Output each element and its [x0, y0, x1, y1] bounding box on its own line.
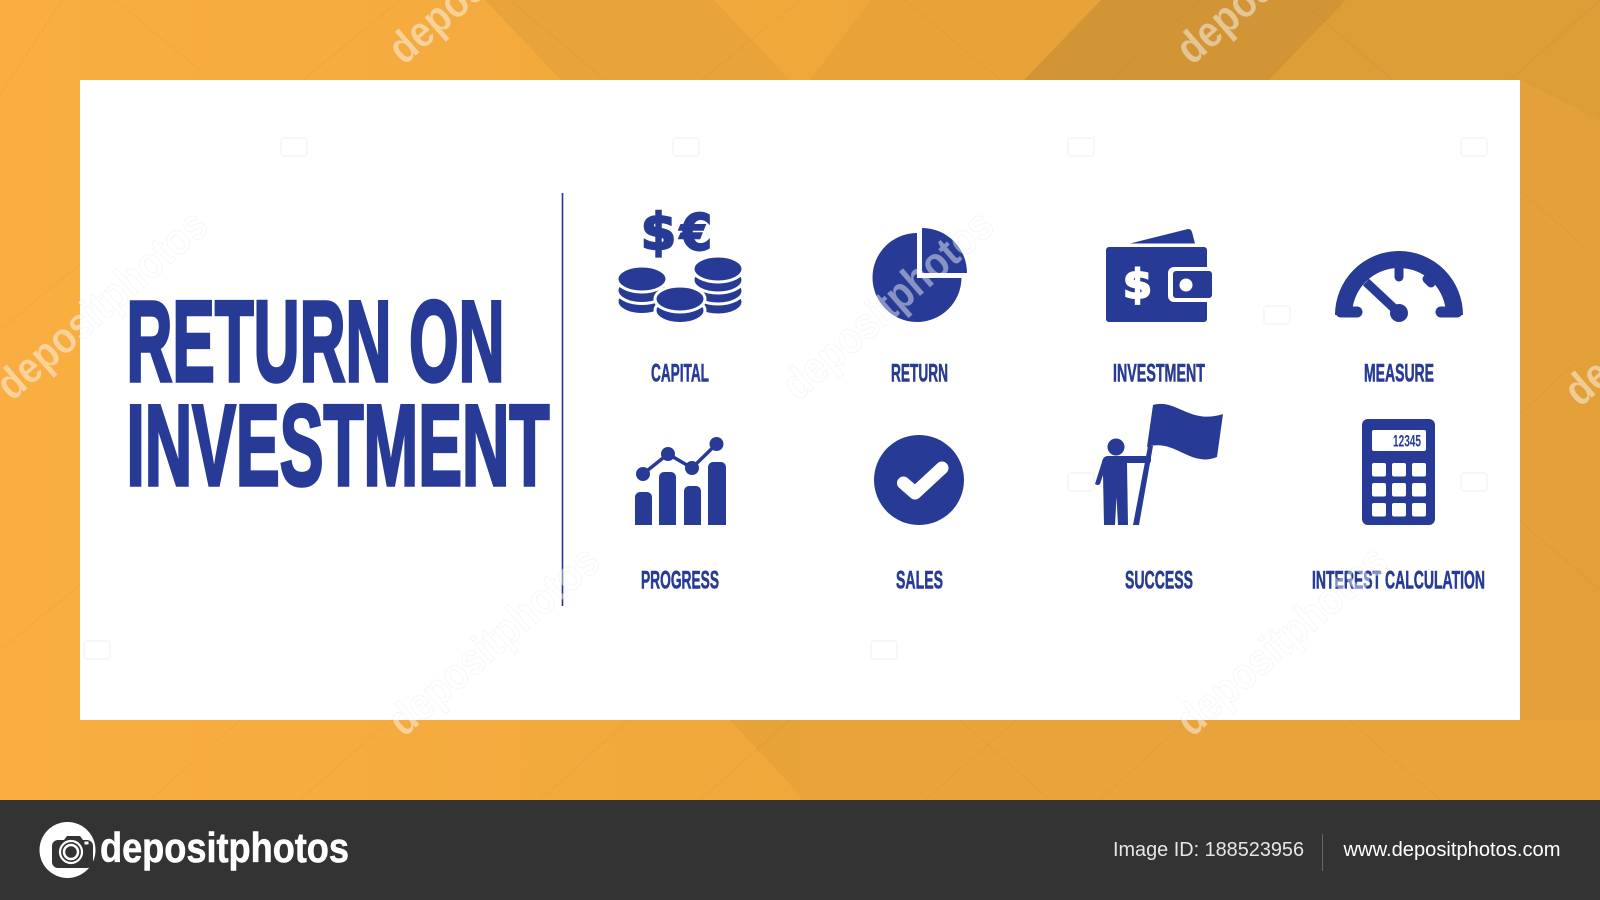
label: return: RETURN — [891, 360, 948, 388]
label: sales: SALES — [896, 567, 943, 595]
icon: capital, currency and coins — [617, 203, 743, 324]
icon: measure, gauge — [1341, 260, 1457, 322]
icon: interest calculation, calculator — [1362, 419, 1435, 525]
white content panel — [80, 80, 1520, 720]
image id: Image ID: 188523956 — [1113, 839, 1304, 861]
icon: sales, check mark — [874, 435, 964, 525]
icon: capital, currency and coins: $ — [641, 203, 676, 261]
icon: capital, currency and coins: € — [679, 204, 712, 262]
title: return on investment: INVESTMENT — [126, 382, 550, 510]
watermarks: depositphotos — [772, 200, 1003, 410]
icon: investment, wallet — [1106, 229, 1214, 322]
footer logo — [40, 822, 349, 878]
website url: www.depositphotos.com — [1342, 839, 1560, 861]
icon: return, pie chart — [873, 228, 967, 322]
icon: progress, bars and line — [635, 437, 726, 525]
watermarks: depositphotos — [378, 536, 609, 746]
footer bar — [0, 800, 1600, 900]
watermarks: depositphotos — [1166, 536, 1397, 746]
icon: success, person with flag — [1095, 404, 1223, 525]
title: return on investment — [126, 278, 550, 510]
icon: investment, wallet: $ — [1123, 262, 1152, 308]
vertical divider — [562, 193, 563, 606]
icon: interest calculation, calculator: 12345 — [1393, 432, 1421, 450]
watermark camera marks — [84, 138, 1487, 659]
label: success: SUCCESS — [1125, 567, 1193, 595]
label: progress: PROGRESS — [641, 567, 719, 595]
label: capital: CAPITAL — [651, 360, 709, 388]
label: investment: INVESTMENT — [1113, 360, 1205, 388]
label: measure: MEASURE — [1364, 360, 1434, 388]
title: return on investment: RETURN ON — [126, 278, 504, 406]
footer logo: depositphotos — [100, 824, 349, 871]
footer separator — [1322, 834, 1323, 871]
